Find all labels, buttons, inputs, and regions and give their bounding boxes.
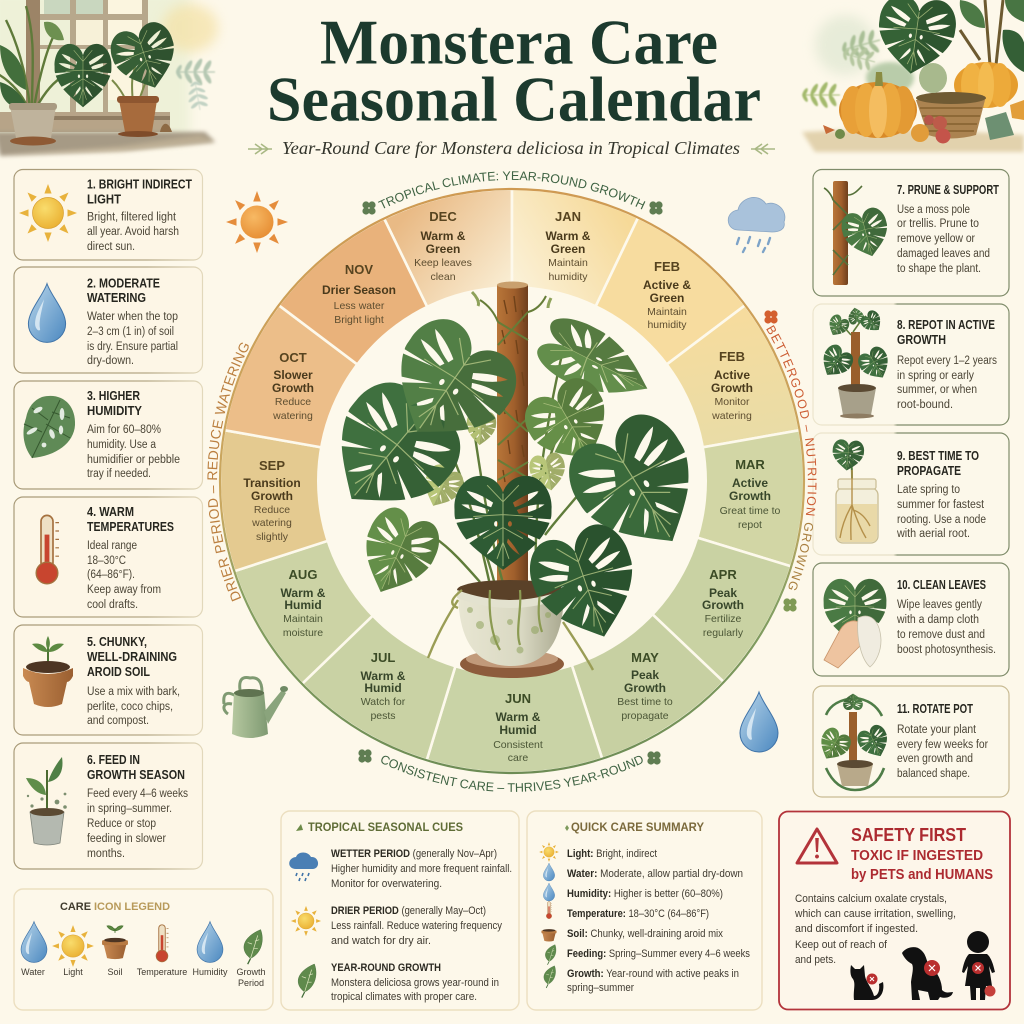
month text: SEP: Growth (251, 489, 293, 503)
safety text: Keep out of reach of (795, 939, 888, 951)
panel: 11 rotate pot: every few weeks for (897, 739, 988, 751)
panel: care icon legend (14, 889, 273, 1010)
panel: 3 higher humidity: HUMIDITY (87, 404, 143, 418)
summary text: Growth: Year-round with active peaks in (567, 968, 739, 980)
panel: 7 prune and support: remove yellow or (897, 233, 975, 245)
legend: light: Light (63, 967, 83, 977)
icon: orange sun (226, 191, 288, 253)
panel: 4 warm temperatures: TEMPERATURES (87, 520, 174, 534)
panel: 11 rotate pot: Rotate your plant (897, 724, 977, 736)
safety heading: SAFETY FIRST (851, 825, 966, 845)
panel: 2 moderate watering: WATERING (87, 291, 146, 305)
panel: 2 moderate watering: Water when the top (87, 311, 178, 323)
summary text: Soil: Chunky, well-draining aroid mix (567, 928, 723, 940)
segment: JUN (427, 664, 602, 773)
panel: 8 repot in active growth: 8. REPOT IN ACTIVE (897, 318, 995, 332)
title: Seasonal Calendar (267, 64, 761, 134)
segment: JUL (302, 614, 456, 760)
month text: FEB active growth (711, 349, 753, 422)
month text: NOV: Drier Season (322, 283, 396, 297)
curved label: left: DRIER PERIOD – REDUCE WATERING (207, 342, 249, 602)
month text: AUG: moisture (283, 627, 323, 639)
month text: OCT: Slower (273, 368, 313, 382)
safety text: and pets. (795, 954, 836, 966)
month text: APR: Growth (702, 598, 744, 612)
safety text: which can cause irritation, swelling, (794, 908, 956, 920)
panel: 10 clean leaves: 10. CLEAN LEAVES (897, 578, 986, 592)
month text: JAN: Warm & (546, 229, 591, 243)
panel: 3 higher humidity: 3. HIGHER (87, 389, 140, 403)
month text: JUN (493, 691, 543, 764)
month text: JAN: humidity (548, 271, 588, 283)
panel: 1 bright indirect light: all year. Avoid harsh (87, 226, 179, 238)
panel: 8 repot in active growth: root-bound. (897, 399, 953, 411)
month text: APR: APR (709, 567, 737, 582)
month text: NOV: NOV (345, 262, 373, 277)
panel: quick care summary (527, 811, 762, 1010)
panel: 2 moderate watering (14, 267, 202, 373)
leaf: top-left big (369, 306, 530, 466)
icon: thermometer (36, 515, 59, 584)
icon: seedling in metal pot (26, 757, 67, 845)
panel: 5 chunky soil: and compost. (87, 715, 149, 727)
panel: 6 feed in growth season: 6. FEED IN (87, 753, 140, 767)
month text: DEC: Keep leaves (414, 257, 472, 269)
panel: 6 feed in growth season: Reduce or stop (87, 818, 156, 830)
curved label: bottom: CONSISTENT CARE – THRIVES YEAR-ROUND (381, 756, 643, 792)
leaf: left big (306, 368, 475, 538)
panel: 4 warm temperatures: Keep away from (87, 584, 161, 596)
panel: 2 moderate watering: 2–3 cm (1 in) of soil (87, 326, 174, 338)
icon: sun (19, 184, 77, 242)
segment: OCT (224, 305, 359, 448)
panel: 4 warm temperatures: 18–30°C (87, 555, 126, 567)
leaf: center front (454, 476, 552, 570)
background pale leaves (416, 461, 467, 514)
drier period text: DRIER PERIOD (generally May–Oct) (331, 905, 486, 917)
panel: 6 feed in growth season (14, 743, 202, 869)
month text: JUN: Consistent (493, 739, 543, 751)
drier period text: and watch for dry air. (331, 935, 431, 947)
panel: 5 chunky soil: AROID SOIL (87, 665, 150, 679)
month text: MAR: Growth (729, 489, 771, 503)
segment: JAN (512, 189, 638, 308)
month text: FEB: humidity (647, 319, 687, 331)
panel: 9 best time to propagate: with aerial root. (896, 528, 970, 540)
month text: OCT (272, 350, 314, 422)
panel: 3 higher humidity: Aim for 60–80% (87, 424, 161, 436)
leaf: center right (516, 370, 625, 477)
month text: JUN: Humid (499, 723, 537, 737)
panel: 6 feed in growth season: GROWTH SEASON (87, 768, 185, 782)
panel: 6 feed in growth season: in spring–summer. (87, 803, 172, 815)
month text: JUL: JUL (371, 650, 395, 665)
icon: leaf with droplets (24, 396, 75, 458)
wetter period text: WETTER PERIOD (generally Nov–Apr) (331, 848, 497, 860)
month text: JUL: Humid (364, 681, 402, 695)
panel: 10 clean leaves (813, 563, 1009, 676)
month text: AUG (281, 567, 326, 639)
safety heading: by PETS and HUMANS (851, 867, 993, 883)
segment: NOV (279, 218, 428, 365)
panel: 3 higher humidity (14, 381, 202, 489)
month text: APR: Fertilize (705, 613, 742, 625)
legend: humidity: Humidity (192, 967, 228, 977)
drier period text (331, 905, 502, 947)
month text: JAN: Maintain (548, 257, 588, 269)
icon: rain cloud (289, 852, 318, 881)
panel: 1 bright indirect light (14, 170, 202, 260)
segment: APR (651, 537, 791, 682)
year-round growth text (331, 962, 499, 1003)
summary icons (539, 842, 559, 988)
panel: 8 repot in active growth: Repot every 1–2 years (897, 355, 997, 367)
icon: child silhouette (962, 931, 996, 1000)
month text: MAY: MAY (631, 650, 659, 665)
stems (435, 350, 590, 590)
panel: 8 repot in active growth (813, 304, 1009, 425)
panel: 9 best time to propagate: rooting. Use a node (897, 514, 986, 526)
month text: FEB: Green (650, 291, 684, 305)
summary text (567, 848, 750, 994)
summary text: spring–summer (567, 982, 634, 994)
month text: MAR: MAR (735, 457, 765, 472)
month text: OCT: watering (272, 410, 313, 422)
cues heading: TROPICAL SEASONAL CUES (308, 820, 463, 834)
leaf: lower right (521, 517, 652, 653)
panel: 7 prune and support: Use a moss pole (897, 204, 970, 216)
icon: leaf (298, 964, 316, 998)
icon: dog silhouette (902, 947, 953, 1000)
summary text: Water: Moderate, allow partial dry-down (567, 868, 743, 880)
icon: rotating potted plant (813, 694, 894, 790)
right pot (119, 100, 157, 132)
wetter period text: Monitor for overwatering. (331, 878, 442, 890)
month text: JAN (546, 209, 591, 283)
month text: JAN: Green (551, 242, 585, 256)
safety text (794, 893, 956, 966)
month text: JUL: pests (370, 710, 396, 722)
panel: 2 moderate watering: is dry. Ensure partial (87, 341, 178, 353)
leaf: lower left (348, 501, 447, 606)
month text: MAR: repot (738, 519, 762, 531)
month text: FEB (643, 259, 691, 331)
month text: JUN: care (508, 752, 528, 764)
illustration: window with potted monstera plants (0, 0, 218, 156)
chart: seasonal ring calendar (220, 189, 804, 773)
panel: 5 chunky soil: WELL-DRAINING (87, 650, 177, 664)
basket (916, 100, 985, 138)
month text: DEC: clean (430, 271, 456, 283)
panel: safety first (779, 812, 1010, 1010)
legend: water (21, 922, 47, 977)
safety heading (851, 825, 993, 883)
month text: OCT: Reduce (275, 396, 311, 408)
legend: soil (102, 926, 128, 977)
month text: FEB: Active & (643, 278, 691, 292)
panel: 7 prune and support: damaged leaves and (897, 248, 990, 260)
panel: 8 repot in active growth: in spring or early (897, 370, 974, 382)
legend: light (52, 925, 94, 977)
month text: JUL: Watch for (361, 696, 406, 708)
month text: DEC: Green (426, 242, 460, 256)
month text: FEB: Maintain (647, 306, 687, 318)
icon: pot with seedling (23, 636, 73, 707)
panel: 4 warm temperatures: 4. WARM (87, 505, 134, 519)
leaf: right big (555, 402, 722, 572)
month text: MAY: propagate (621, 710, 669, 722)
month text: SEP: SEP (259, 458, 285, 473)
panel: 9 best time to propagate: Late spring to (897, 484, 960, 496)
panel: 3 higher humidity: humidity. Use a (87, 439, 157, 451)
panel: 4 warm temperatures (14, 497, 202, 617)
wetter period text (331, 848, 512, 890)
panel: 9 best time to propagate: PROPAGATE (897, 464, 961, 478)
panel: 10 clean leaves: with a damp cloth (896, 614, 979, 626)
window monstera leaf (55, 44, 111, 107)
curved label: right: BETTERGOOD – NUTRITION GROWING (766, 325, 816, 590)
month text: JUN: Warm & (496, 710, 541, 724)
panel: 9 best time to propagate (813, 433, 1009, 555)
month text: NOV (322, 262, 396, 326)
legend title: CARE ICON LEGEND (60, 901, 170, 913)
safety text: and discomfort if ingested. (795, 923, 918, 935)
legend: temperature: Temperature (137, 967, 187, 977)
month text: MAR: Active (732, 476, 768, 490)
panel: 2 moderate watering: 2. MODERATE (87, 276, 160, 290)
legend: growth period: Period (238, 978, 264, 988)
panel: 1 bright indirect light: direct sun. (87, 241, 135, 253)
panel: 11 rotate pot: balanced shape. (897, 768, 970, 780)
month text: APR (702, 567, 744, 639)
icon: cat silhouette (850, 965, 883, 1000)
month text: FEB active growth: Growth (711, 381, 753, 395)
month text: MAY: Best time to (617, 696, 673, 708)
panel: 11 rotate pot: even growth and (897, 753, 973, 765)
panel: 7 prune and support: or trellis. Prune to (897, 218, 979, 230)
panel: 1 bright indirect light: Bright, filtered light (87, 212, 177, 224)
year-round growth text: YEAR-ROUND GROWTH (331, 962, 441, 974)
segment: MAR (696, 430, 804, 566)
legend: water: Water (21, 967, 45, 977)
panel: 5 chunky soil (14, 625, 202, 735)
panel: 10 clean leaves: to remove dust and (897, 629, 985, 641)
panel: 10 clean leaves: boost photosynthesis. (897, 644, 996, 656)
month text: FEB active growth: Active (714, 368, 750, 382)
panel: 9 best time to propagate: summer for fastest (897, 499, 985, 511)
panel: 5 chunky soil: perlite, coco chips, (87, 701, 173, 713)
left pot (10, 106, 56, 138)
central monstera plant on moss pole (306, 282, 722, 678)
summary text: Temperature: 18–30°C (64–86°F) (567, 908, 709, 920)
panel: 7 prune and support (813, 170, 1009, 296)
segment: MAY (571, 613, 724, 759)
month text: AUG: AUG (289, 567, 317, 582)
panel: 1 bright indirect light: LIGHT (87, 192, 121, 206)
month text: MAY: Growth (624, 681, 666, 695)
panel: 4 warm temperatures: Ideal range (87, 540, 137, 552)
segment: DEC (384, 189, 512, 308)
pot (428, 580, 593, 678)
panel: 4 warm temperatures: (64–86°F). (87, 569, 135, 581)
month text: FEB active growth: Monitor (714, 396, 750, 408)
month text: SEP: Reduce (254, 504, 290, 516)
summary heading: QUICK CARE SUMMARY (571, 820, 704, 834)
panel: 7 prune and support: to shape the plant. (897, 263, 981, 275)
icon: sun (291, 906, 321, 936)
left pumpkin (839, 82, 917, 138)
month text: OCT: Growth (272, 381, 314, 395)
curve end ornaments (358, 201, 797, 765)
icon: hand wiping leaf (824, 579, 886, 668)
icon: cutting rooting in jar (831, 439, 878, 543)
illustration: pumpkins, basket and tropical leaves (801, 0, 1024, 152)
month text: FEB active growth: watering (711, 410, 752, 422)
panel: 6 feed in growth season: Feed every 4–6 weeks (87, 788, 188, 800)
icon: warning triangle (797, 829, 837, 863)
month text: JAN: JAN (555, 209, 581, 224)
summary text: Feeding: Spring–Summer every 4–6 weeks (567, 948, 750, 960)
panel: 9 best time to propagate: 9. BEST TIME TO (897, 449, 979, 463)
safety heading: TOXIC IF INGESTED (851, 848, 983, 864)
year-round growth text: Monstera deliciosa grows year-round in (331, 977, 499, 989)
month text: AUG: Warm & (281, 586, 326, 600)
panel: 5 chunky soil: Use a mix with bark, (87, 686, 180, 698)
month text: AUG: Maintain (283, 613, 323, 625)
panel: 1 bright indirect light: 1. BRIGHT INDIRECT (87, 178, 192, 192)
panel: 8 repot in active growth: GROWTH (897, 333, 946, 347)
month text: JUL: Warm & (361, 669, 406, 683)
small fruits (911, 124, 929, 142)
month text: SEP: watering (251, 517, 292, 529)
icon: watering can (224, 678, 288, 738)
month text: NOV: Bright light (334, 314, 384, 326)
month text: MAY (617, 650, 673, 722)
panel: 8 repot in active growth: summer, or when (897, 384, 977, 396)
right pumpkin (954, 62, 1018, 108)
segment: AUG (234, 540, 374, 684)
top leaf (873, 0, 959, 79)
icon: potted plant on pole (815, 306, 896, 418)
month text: DEC (414, 209, 472, 283)
month text: SEP: Transition (243, 476, 301, 490)
title (267, 8, 761, 134)
subtitle with leaf sprigs: Year-Round Care for Monstera deliciosa in Tropical Climates (282, 138, 740, 158)
month text: SEP: slightly (256, 531, 289, 543)
panel: 2 moderate watering: dry-down. (87, 355, 134, 367)
legend: soil: Soil (107, 967, 123, 977)
month text: DEC: Warm & (421, 229, 466, 243)
month text: FEB active growth: FEB (719, 349, 745, 364)
segment: FEB active (665, 305, 800, 448)
month text: OCT: OCT (279, 350, 307, 365)
summary text: Light: Bright, indirect (567, 848, 657, 860)
summary text: Humidity: Higher is better (60–80%) (567, 888, 723, 900)
month text: DEC: DEC (429, 209, 457, 224)
panel: tropical seasonal cues (281, 811, 519, 1010)
icon: blue water drop (740, 692, 778, 752)
wetter period text: Higher humidity and more frequent rainfall. (331, 863, 512, 875)
panel: 3 higher humidity: humidifier or pebble (87, 454, 180, 466)
moss pole (472, 282, 551, 595)
curved label: top: TROPICAL CLIMATE: YEAR-ROUND GROWTH (378, 171, 646, 210)
safety text: Contains calcium oxalate crystals, (795, 893, 947, 905)
segment: SEP (220, 430, 329, 571)
segment: FEB (595, 218, 745, 365)
month text: MAR (720, 457, 780, 531)
panel: 11 rotate pot (813, 686, 1009, 797)
month text: NOV: Less water (334, 300, 385, 312)
year-round growth text: tropical climates with proper care. (331, 991, 477, 1003)
month text: FEB: FEB (654, 259, 680, 274)
leaf: top right narrow (531, 309, 661, 416)
icon: moss pole with leaf (824, 181, 894, 285)
month text: APR: regularly (703, 627, 744, 639)
icon: rain cloud (728, 197, 785, 252)
month text: APR: Peak (709, 586, 737, 600)
legend: temperature (137, 925, 187, 977)
month text: JUN: JUN (505, 691, 531, 706)
month text: MAY: Peak (631, 668, 659, 682)
drier period text: Less rainfall. Reduce watering frequency (331, 920, 502, 932)
title: Monstera Care (320, 8, 718, 78)
panel: 5 chunky soil: 5. CHUNKY, (87, 635, 147, 649)
month text: JUL (361, 650, 406, 722)
month text: MAR: Great time to (720, 505, 780, 517)
panel: 4 warm temperatures: cool drafts. (87, 599, 138, 611)
legend: growth period: Growth (236, 967, 266, 977)
month text: SEP (243, 458, 301, 543)
panel: 3 higher humidity: tray if needed. (87, 468, 151, 480)
legend: growth period (236, 930, 266, 988)
icon: water drop (28, 284, 66, 342)
panel: 6 feed in growth season: feeding in slower (87, 833, 166, 845)
panel: 11 rotate pot: 11. ROTATE POT (897, 702, 973, 716)
legend: humidity (192, 922, 228, 977)
month text: AUG: Humid (284, 598, 322, 612)
panel: 6 feed in growth season: months. (87, 848, 125, 860)
panel: 10 clean leaves: Wipe leaves gently (897, 599, 982, 611)
